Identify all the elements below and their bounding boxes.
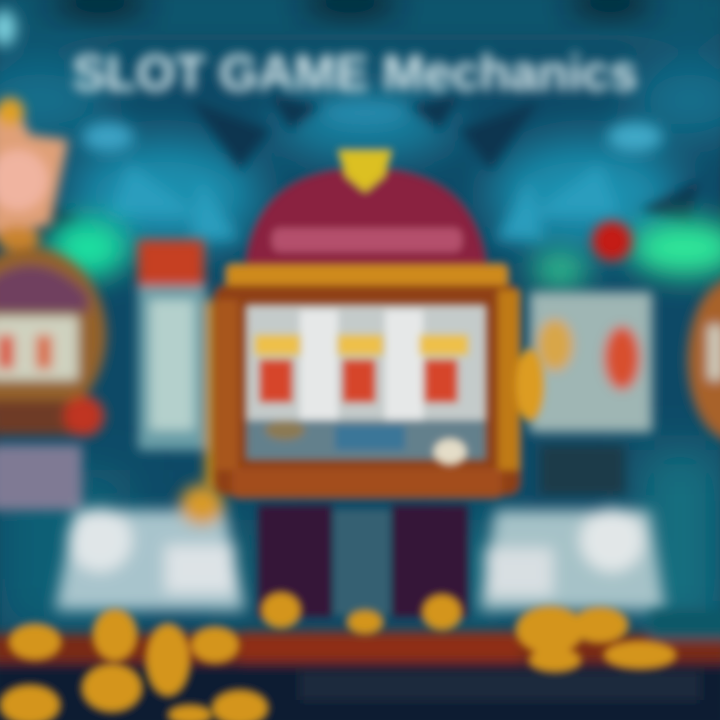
left pedestal <box>55 485 245 610</box>
centre machine <box>214 150 544 617</box>
right edge machine <box>688 280 720 440</box>
background ray pattern <box>20 95 700 240</box>
frame <box>214 264 544 498</box>
sevens <box>255 335 468 402</box>
left narrow machine <box>138 240 227 490</box>
legs <box>258 505 468 617</box>
left slot machine <box>0 98 106 510</box>
right machine <box>530 221 652 495</box>
background light patches <box>0 10 663 152</box>
gold coins <box>0 592 676 720</box>
reels screen <box>246 305 486 465</box>
crown <box>0 100 68 235</box>
arch top <box>245 150 487 268</box>
right pedestal <box>480 508 665 610</box>
base strip <box>0 610 720 720</box>
title: SLOT GAME Mechanics <box>72 45 638 101</box>
green glows <box>48 218 720 288</box>
